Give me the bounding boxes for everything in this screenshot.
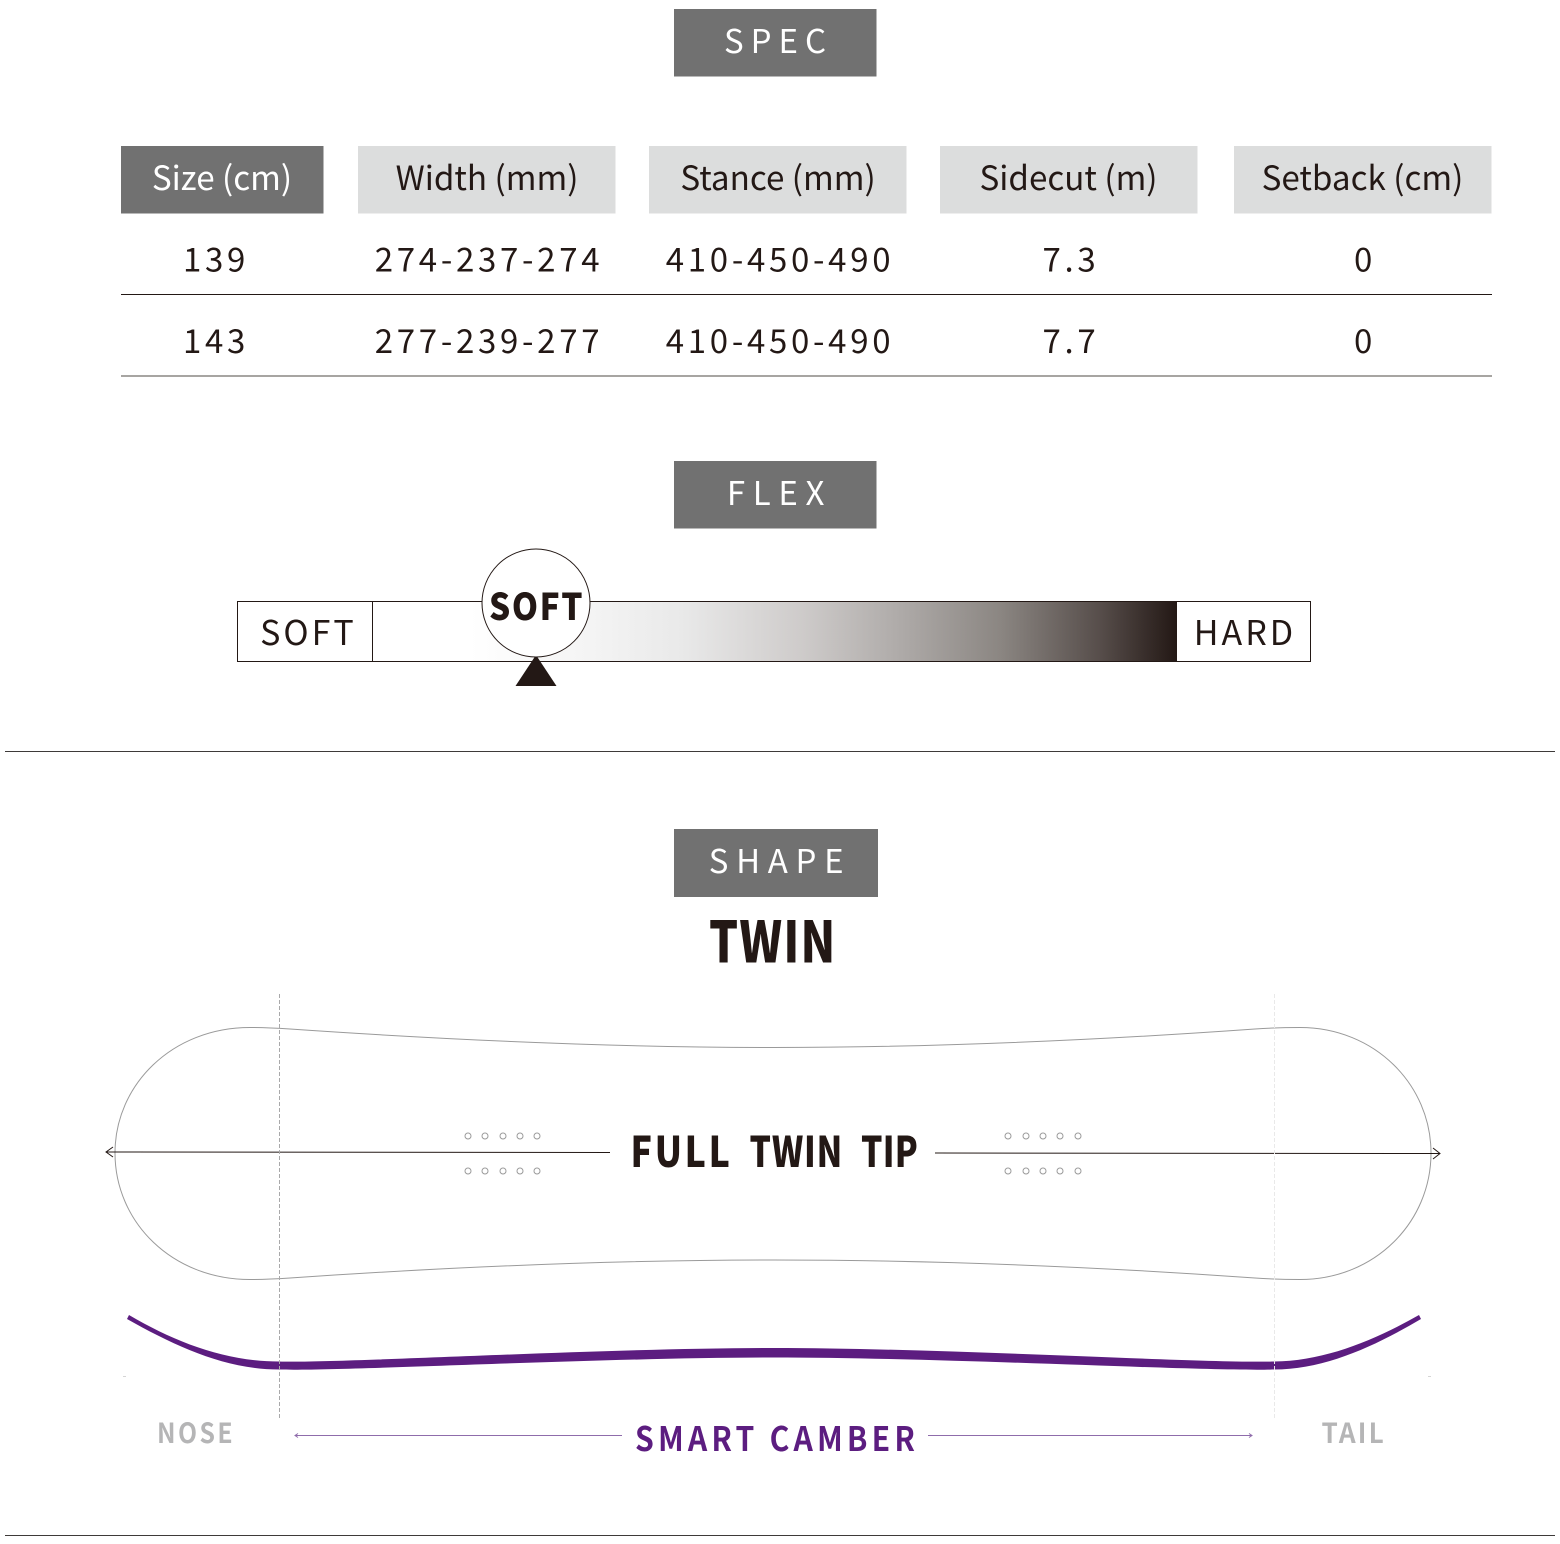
insert holes right [1005,1133,1081,1174]
label: HARD end: HARD [1194,606,1296,655]
label: FULL TWIN TIP [630,1118,918,1180]
label: SMART CAMBER: SMART CAMBER [635,1413,915,1462]
table header row: Stance (mm) [680,151,876,200]
panel: spec table [121,146,1492,376]
diagram: board outline [106,1028,1440,1280]
table header row [121,146,1492,214]
table row: 139 [183,234,1376,282]
table header row: Width (mm) [396,151,578,200]
axis arrow left [106,1147,610,1157]
table row: 143 [183,315,1376,363]
table row: 143: 7.7 [1043,315,1099,363]
table row: 139: 139 [183,234,249,282]
tail dashed line [1274,994,1276,1420]
table row: 143: 143 [183,315,249,363]
label: TAIL: TAIL [1322,1411,1384,1451]
marker: SOFT circle: SOFT [489,578,583,632]
arrow right [928,1434,1252,1438]
table row: 143: 0 [1354,315,1376,363]
table row: 143: 410-450-490 [666,315,894,363]
heading: FLEX: FLEX [727,467,832,515]
heading: SPEC [674,9,876,76]
marker: triangle [516,655,556,686]
table row: 139: 0 [1354,234,1376,282]
label: FULL TWIN TIP: FULL [630,1120,730,1180]
table header row: Setback (cm) [1262,151,1463,200]
arrow left [295,1434,622,1438]
nose dashed line [278,994,280,1420]
table header row: Sidecut (m) [979,151,1158,200]
label: NOSE: NOSE [157,1411,233,1451]
label: SMART CAMBER [295,1413,1252,1462]
heading: SHAPE: SHAPE [709,835,851,883]
axis arrow right [935,1148,1440,1159]
marker: SOFT circle [482,549,590,657]
heading: FLEX [674,461,876,528]
table row: 139: 410-450-490 [666,234,894,282]
label: FULL TWIN TIP: TWIN [750,1118,842,1179]
heading: SPEC: SPEC [724,15,833,63]
label: FULL TWIN TIP: TIP [861,1118,918,1179]
table header row: Size (cm) [152,151,292,200]
heading: TWIN: TWIN [709,896,835,979]
table row: 139: 274-237-274 [375,234,603,282]
chart: flex scale [238,549,1310,686]
insert holes left [465,1133,540,1174]
table row: 139: 7.3 [1043,234,1099,282]
label: SOFT end: SOFT [260,606,357,655]
heading: SHAPE [674,829,878,897]
table row: 143: 277-239-277 [375,315,603,363]
diagram: camber profile [127,1315,1421,1370]
